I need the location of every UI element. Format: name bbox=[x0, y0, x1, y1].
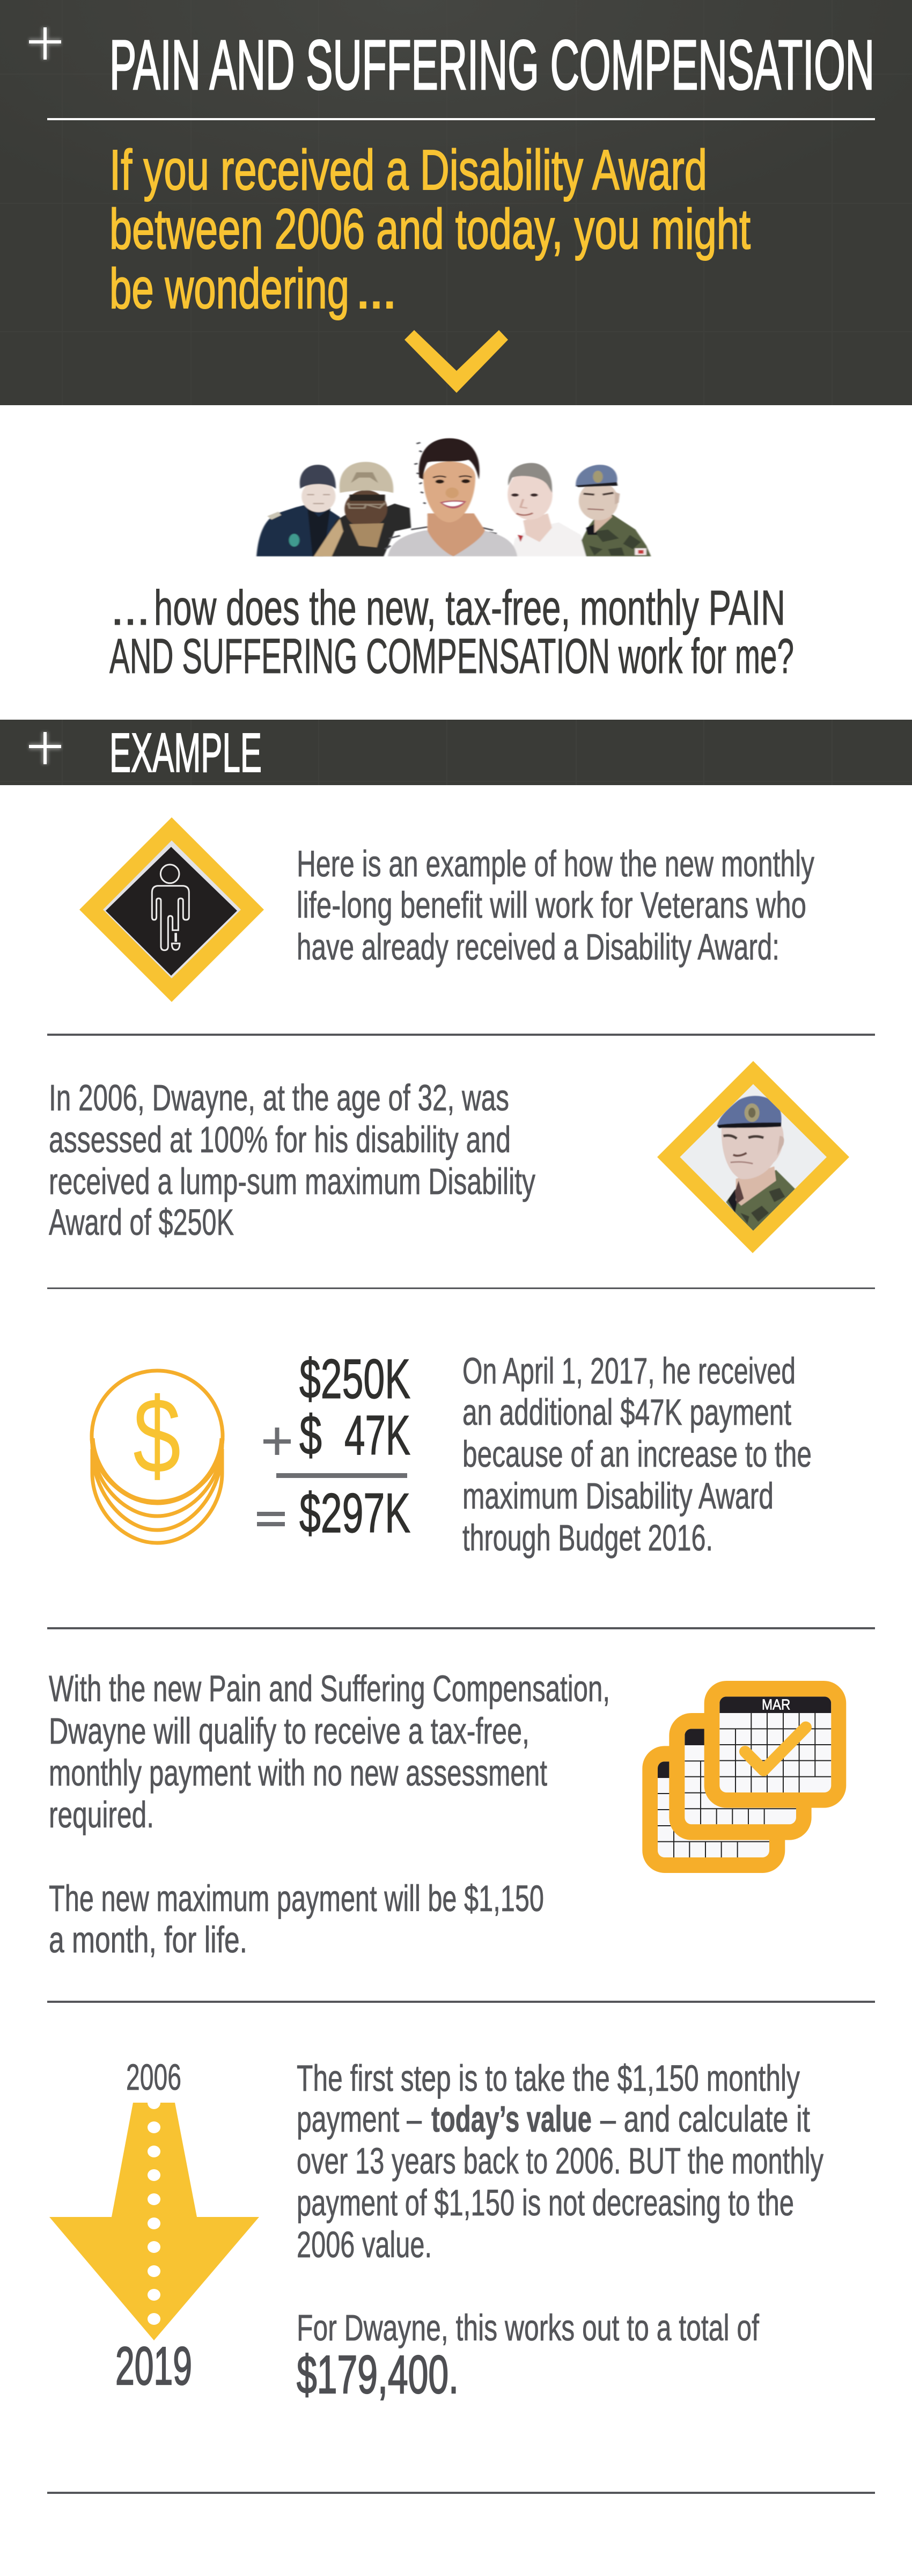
sum: award calculation: $ bbox=[299, 1404, 322, 1467]
text: new compensation: a month, for life. bbox=[49, 1919, 247, 1960]
text: first step explanation: 2006 value. bbox=[297, 2224, 432, 2265]
text: additional payment bbox=[462, 1350, 812, 1558]
title rule bbox=[47, 118, 875, 120]
text: new compensation: Dwayne will qualify to receive a tax-free, bbox=[49, 1710, 529, 1752]
text: first step explanation bbox=[297, 2058, 823, 2348]
text: new compensation bbox=[49, 1668, 610, 1960]
icon: down chevron bbox=[404, 330, 508, 393]
sum: award calculation: $250K bbox=[299, 1348, 410, 1410]
icon: plus bbox=[29, 27, 61, 60]
text: additional payment: an additional $47K payment bbox=[462, 1392, 791, 1433]
icon: dollar sign: $ bbox=[133, 1376, 181, 1496]
text: example intro bbox=[297, 843, 814, 968]
text: Dwayne 2006 assessment: In 2006, Dwayne, at the age of 32, was bbox=[49, 1077, 509, 1118]
text: additional payment: maximum Disability Award bbox=[462, 1475, 774, 1517]
text: new compensation: With the new Pain and Suffering Compensation, bbox=[49, 1668, 610, 1709]
intro question bbox=[109, 138, 751, 320]
banner heading: EXAMPLE bbox=[109, 722, 262, 784]
icon: amputee figure diamond bbox=[79, 817, 264, 1002]
text: first step explanation: payment – bbox=[297, 2098, 422, 2140]
text: first step explanation: today’s value bbox=[431, 2098, 592, 2140]
sum: award calculation: 47K bbox=[344, 1404, 410, 1467]
text: new compensation: monthly payment with no new assessment bbox=[49, 1752, 547, 1794]
text: first step explanation: – and calculate it bbox=[600, 2098, 810, 2140]
photo: Dwayne in diamond bbox=[657, 1061, 849, 1253]
timeline label: 2019: 2019 bbox=[115, 2336, 192, 2396]
text: Dwayne 2006 assessment bbox=[49, 1077, 535, 1243]
text: new compensation: required. bbox=[49, 1794, 154, 1835]
total amount: $179,400. bbox=[297, 2345, 459, 2405]
panel: chalkboard header bbox=[0, 0, 912, 405]
sum: award calculation bbox=[257, 1348, 410, 1545]
question heading: ... bbox=[111, 581, 150, 635]
arrow: 2006 to 2019 timeline bbox=[49, 2096, 259, 2340]
text: Dwayne 2006 assessment: received a lump-sum maximum Disability bbox=[49, 1161, 535, 1202]
text: Dwayne 2006 assessment: Award of $250K bbox=[49, 1202, 234, 1243]
text: Dwayne 2006 assessment: assessed at 100% for his disability and bbox=[49, 1119, 511, 1160]
intro question: ... bbox=[355, 257, 398, 320]
icon: stacked calendars: MAR bbox=[762, 1696, 790, 1713]
intro question: be wondering bbox=[109, 257, 349, 320]
icon: stack of coins bbox=[92, 1371, 223, 1543]
photo: group of veterans bbox=[256, 438, 651, 557]
sum: award calculation: $297K bbox=[299, 1482, 410, 1545]
question heading bbox=[109, 581, 794, 684]
timeline label: 2006: 2006 bbox=[126, 2057, 181, 2098]
panel: example banner bbox=[0, 720, 912, 785]
text: additional payment: through Budget 2016. bbox=[462, 1517, 713, 1558]
text: new compensation: The new maximum payment will be $1,150 bbox=[49, 1878, 544, 1919]
icon: plus bbox=[29, 732, 61, 764]
icon: stacked calendars bbox=[642, 1681, 846, 1873]
